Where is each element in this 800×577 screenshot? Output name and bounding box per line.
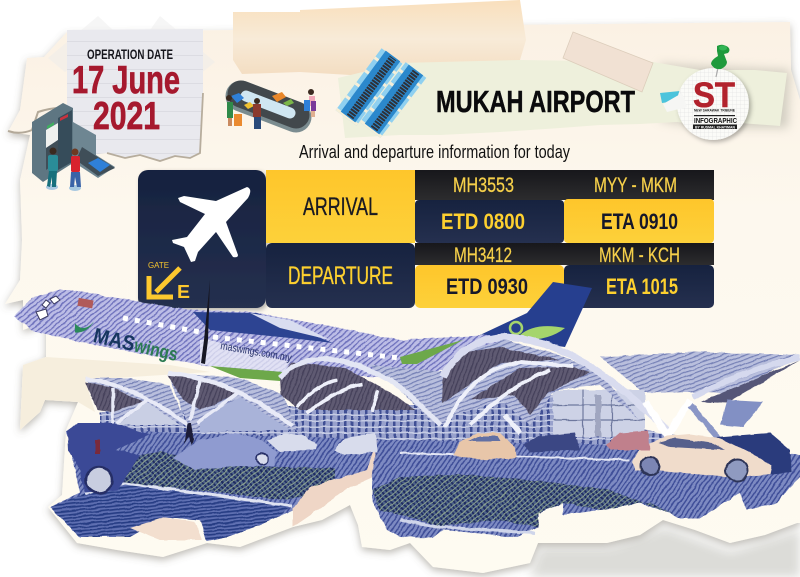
departure cell <box>266 243 415 308</box>
green wing fairing <box>210 366 283 381</box>
flag <box>77 298 94 308</box>
date line 2: 2021 <box>93 95 160 138</box>
roof A <box>85 378 187 425</box>
translucent tape on note corners <box>48 16 215 74</box>
ETA 0910 cell <box>564 199 714 243</box>
bottom shadow on white background <box>530 528 800 577</box>
torn green paper strip <box>338 60 790 138</box>
right road <box>400 455 800 518</box>
icon: white plane <box>172 187 250 262</box>
subtitle: Arrival and departure information for today <box>299 142 570 162</box>
departure flight strip: MH3412 <box>454 244 512 267</box>
car: white far <box>267 433 317 452</box>
date line 1: 17 June <box>72 59 180 102</box>
ETD 0800 cell <box>415 200 564 243</box>
security staff <box>46 148 58 190</box>
cream band left <box>20 357 210 430</box>
white tape <box>663 93 687 112</box>
right lower kerb <box>400 520 535 533</box>
right wing roof <box>600 352 800 427</box>
road lower left <box>50 484 290 541</box>
traveller right <box>304 89 316 117</box>
ETD 0930 cell: ETD 0930 <box>446 274 528 299</box>
cabin windows <box>123 318 400 358</box>
car: dark right <box>717 433 792 475</box>
ST infographic badge <box>660 45 749 140</box>
car: dark middle <box>523 433 580 452</box>
wing <box>193 312 333 343</box>
operation date label: OPERATION DATE <box>87 47 173 62</box>
icon: baggage carousel <box>226 89 316 129</box>
gate label: GATE <box>148 261 169 270</box>
cockpit windows <box>36 296 60 320</box>
MASwings logo: MAS <box>91 324 137 356</box>
right road kerb <box>400 453 630 460</box>
MASwings logo <box>71 317 181 366</box>
torn paper note <box>67 29 203 161</box>
car: white far two <box>334 433 378 455</box>
propeller <box>201 280 210 364</box>
operation date note <box>48 16 215 161</box>
roof C <box>280 359 445 425</box>
tan torn paper edge by gate <box>8 108 60 133</box>
traveller left <box>226 95 242 126</box>
gate frame <box>32 103 73 182</box>
round badge <box>677 68 749 140</box>
ETD 0930 cell <box>415 265 564 308</box>
arrival cell <box>266 170 415 243</box>
green push pin <box>711 45 730 77</box>
website on fuselage: maswings.com.my <box>219 340 293 365</box>
torn gap pink edge <box>293 440 377 527</box>
infographic word: INFOGRAPHIC <box>694 116 737 125</box>
car: cream right <box>632 434 772 481</box>
ST logo: ST <box>693 76 735 115</box>
fuselage <box>14 290 520 378</box>
building band <box>100 395 700 445</box>
ground silhouette <box>50 423 800 538</box>
roof B <box>168 373 297 432</box>
icon: gate arrow <box>149 268 180 297</box>
car: red rear <box>606 431 650 450</box>
arrival cell: ARRIVAL <box>303 193 378 221</box>
right foliage <box>372 474 675 527</box>
gate letter: E <box>177 282 190 302</box>
MASwings logo: wings <box>131 335 180 366</box>
passenger <box>69 148 81 191</box>
car: blue left <box>67 423 150 493</box>
flight board <box>138 170 714 308</box>
ETD 0800 cell: ETD 0800 <box>441 209 525 234</box>
arrival flight strip: MYY - MKM <box>594 174 677 197</box>
airplane <box>14 280 592 381</box>
icon: security gate <box>32 103 115 191</box>
ETA 1015 cell: ETA 1015 <box>606 274 678 299</box>
blue tape <box>660 91 683 103</box>
tail fin <box>480 282 592 347</box>
ETA 1015 cell <box>564 265 714 308</box>
tribune name: NEW SARAWAK TRIBUNE <box>694 108 735 112</box>
kerb line <box>85 483 292 506</box>
small pink tape <box>563 32 653 92</box>
main arch roof <box>442 337 720 440</box>
terminal and car park scene <box>50 337 800 541</box>
departure flight strip: MKM - KCH <box>599 244 680 267</box>
ETA 0910 cell: ETA 0910 <box>601 209 678 234</box>
left foliage <box>118 452 335 500</box>
arrival flight strip <box>415 170 714 200</box>
traveller middle <box>253 98 261 129</box>
panel: plane and gate <box>138 170 266 308</box>
beige masking tape top <box>233 0 526 78</box>
departure cell: DEPARTURE <box>288 262 393 290</box>
arrival flight strip: MH3553 <box>453 174 514 197</box>
icon: escalators <box>346 56 416 130</box>
departure flight strip <box>415 243 714 267</box>
pedestrian <box>184 423 194 445</box>
terminal glass facade <box>553 390 645 437</box>
car: tan middle <box>453 433 516 460</box>
title: MUKAH AIRPORT <box>436 84 635 119</box>
byline bar: BY RUSMAL KHATIMAN <box>695 125 735 129</box>
car: silver left <box>173 433 277 470</box>
x-ray machine <box>60 122 115 178</box>
